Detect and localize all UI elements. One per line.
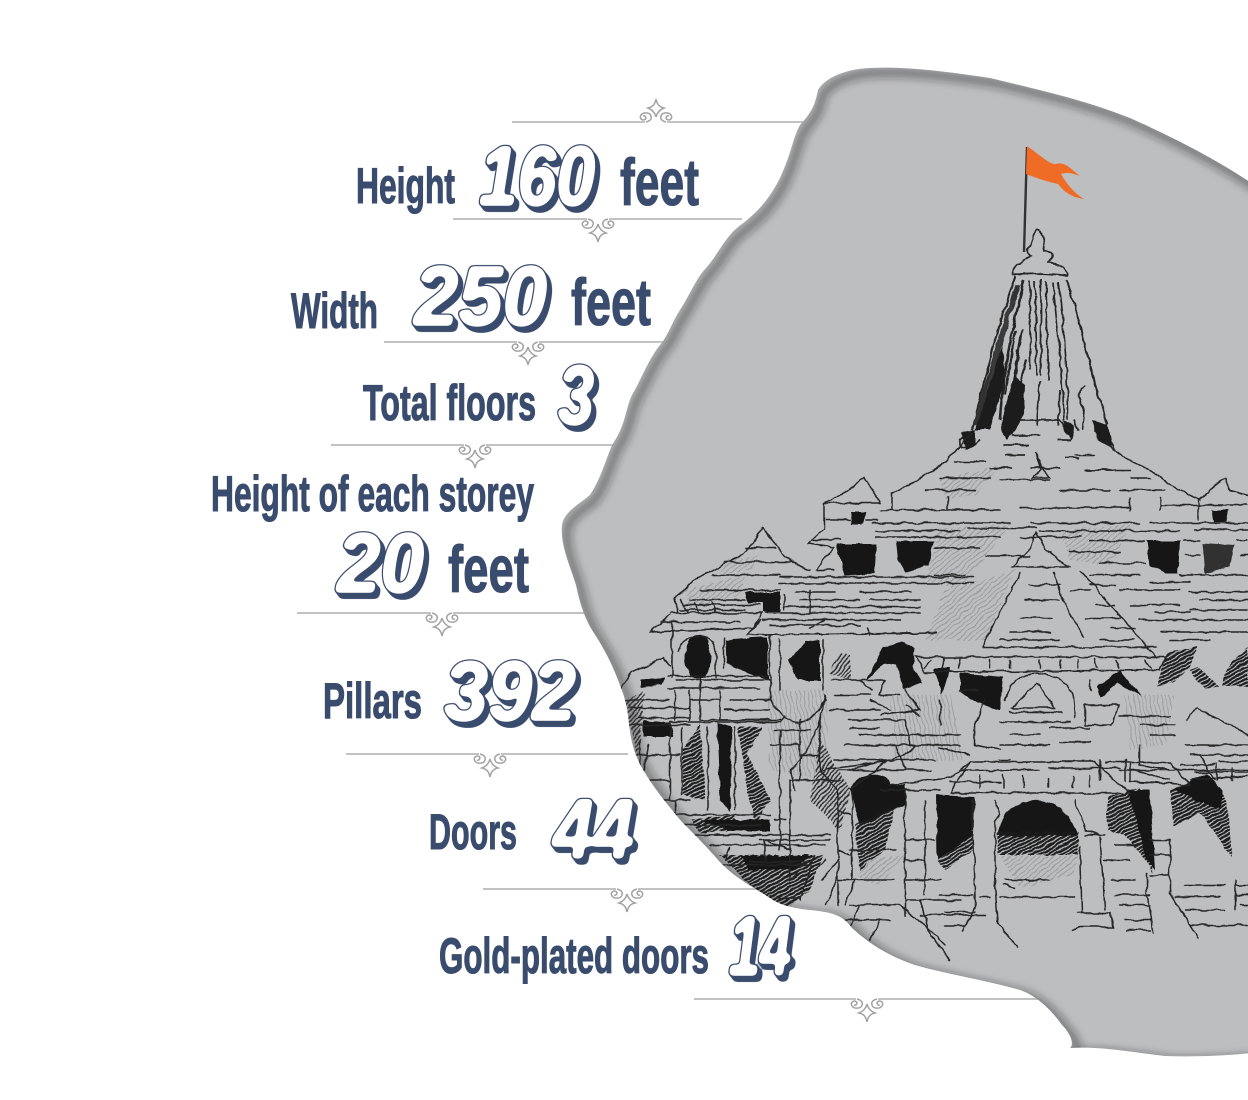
stat: total floors 3: 3 bbox=[558, 348, 594, 442]
stat: height 160 feet bbox=[356, 129, 699, 223]
stat: total floors 3: Total floors bbox=[363, 375, 536, 431]
tower shikhara bbox=[959, 229, 1115, 470]
main roof bbox=[892, 435, 1200, 500]
stat: pillars 392 bbox=[323, 644, 576, 738]
stat: height 160 feet: feet bbox=[620, 145, 699, 219]
temple sketch illustration bbox=[620, 229, 1248, 960]
dark window and arch shadows bbox=[625, 510, 1248, 905]
stat: pillars 392: 392 bbox=[444, 644, 576, 738]
stat: width 250 feet: 250 bbox=[412, 249, 547, 343]
stat: gold-plated doors 14: 14 bbox=[729, 899, 791, 993]
icon: orange flag bbox=[1024, 146, 1084, 252]
arch columns bbox=[963, 800, 1113, 947]
stat: width 250 feet bbox=[291, 249, 651, 343]
dividers with ornaments bbox=[297, 99, 1040, 1022]
stat: total floors 3 bbox=[363, 348, 594, 442]
stat: doors 44 bbox=[429, 782, 634, 876]
stat: gold-plated doors 14 bbox=[439, 899, 791, 993]
left tower bbox=[675, 527, 810, 613]
stat: height 160 feet: Height bbox=[356, 158, 455, 214]
stat: height of each storey 20 feet: Height of each storey bbox=[211, 466, 534, 522]
stat: doors 44: 44 bbox=[551, 782, 634, 876]
bottom-left wall bbox=[700, 835, 830, 900]
stat: height of each storey 20 feet: 20 bbox=[335, 516, 424, 610]
torn paper cut-out panel bbox=[540, 50, 1248, 1070]
stat: width 250 feet: feet bbox=[571, 265, 651, 339]
stat: height of each storey 20 feet: feet bbox=[448, 532, 529, 606]
stat: width 250 feet: Width bbox=[291, 283, 378, 339]
lower eaves bbox=[950, 762, 1130, 793]
stat: height 160 feet: 160 bbox=[479, 129, 595, 223]
middle rows bbox=[820, 680, 960, 780]
architectural line work bbox=[620, 435, 1248, 960]
upper bands bbox=[880, 493, 1248, 510]
stat: height of each storey 20 feet bbox=[211, 466, 534, 610]
light pencil shading bbox=[685, 465, 1175, 888]
central pyramid bbox=[982, 532, 1156, 657]
small towers bbox=[808, 478, 880, 570]
stat: pillars 392: Pillars bbox=[323, 673, 422, 729]
lower rows bbox=[845, 840, 990, 925]
stat: doors 44: Doors bbox=[429, 804, 517, 860]
stat: gold-plated doors 14: Gold-plated doors bbox=[439, 928, 709, 984]
